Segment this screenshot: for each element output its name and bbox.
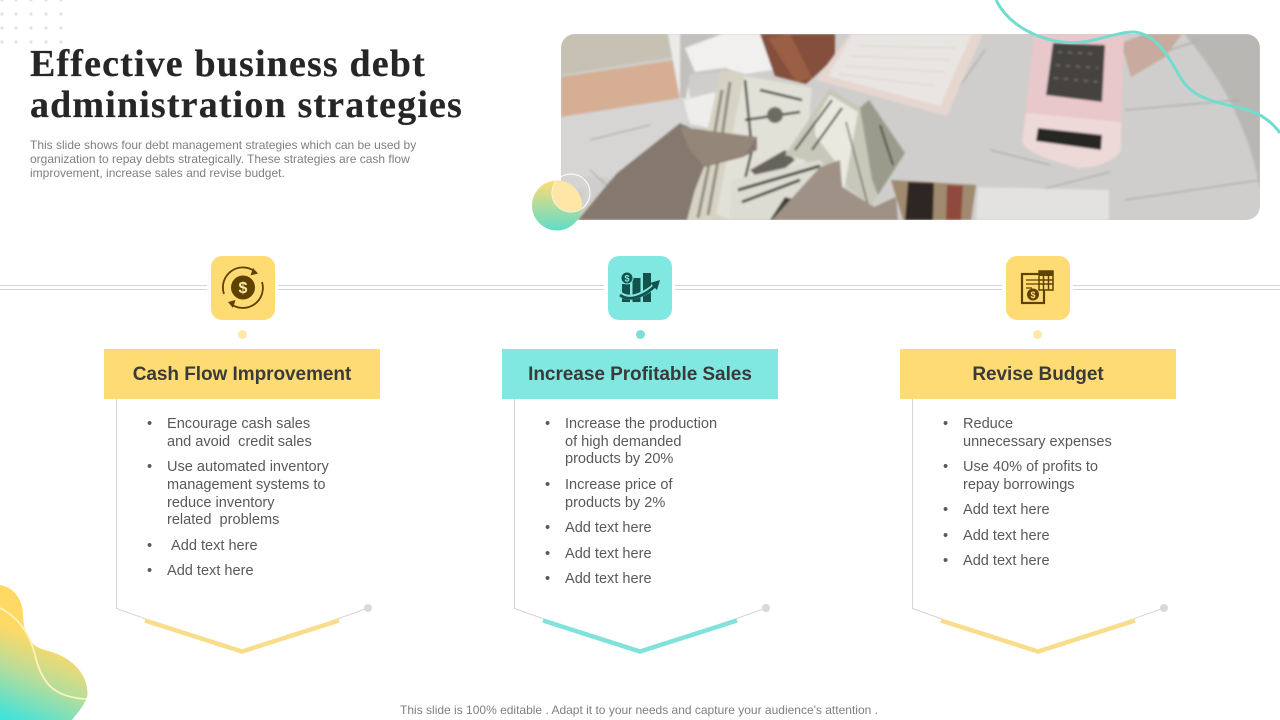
bullet list: Use 40% of profits to [963,459,1098,475]
intro text: This slide shows four debt management strategies which can be used by [30,138,416,152]
icon: budget sheet and calculator: $ [1030,290,1036,300]
bullet list: Add text here [963,502,1050,518]
icon: rising bars: $ [624,274,630,284]
intro text: organization to repay debts strategically. These strategies are cash flow [30,152,410,166]
horizontal connector lines [0,285,1280,290]
decorative gradient bubble [532,174,590,230]
bullet list: Add text here [167,563,254,579]
cash [687,85,732,218]
icon: rising bars [608,256,672,320]
notebook [816,34,983,116]
bullet list: Add text here [963,528,1050,544]
bullet list: Add text here [565,520,652,536]
title: administration strategies [30,84,463,126]
bracket [116,399,372,654]
bullet list [148,416,329,579]
bullet list: and avoid credit sales [167,434,312,450]
column 2: increase profitable sales [502,256,778,654]
table edge and grey backdrop [1184,34,1260,190]
bullet list: Add text here [565,546,652,562]
bullet list: management systems to [167,477,325,493]
decorative gradient blob [0,585,88,720]
bracket [912,399,1168,654]
photo: hands counting money [561,34,1260,220]
bullet list: Add text here [963,553,1050,569]
bullet list: Increase price of [565,477,673,493]
bullet list: Add text here [565,571,652,587]
bullet list: products by 20% [565,451,673,467]
heading [900,349,1176,399]
marker dot [1033,330,1042,339]
column 1: cash flow improvement [104,256,380,654]
bullet list: products by 2% [565,495,665,511]
marble veins [590,40,1260,215]
bullet list: Reduce [963,416,1013,432]
bullet list: Add text here [171,538,258,554]
bullet list [944,416,1112,569]
bullet list: Use automated inventory [167,459,329,475]
heading: Cash Flow Improvement [133,364,351,385]
heading [104,349,380,399]
intro text: improvement, increase sales and revise budget. [30,166,285,180]
bullet list: unnecessary expenses [963,434,1112,450]
intro text [30,138,416,180]
dot pattern [0,0,62,44]
title [30,43,463,126]
heading: Revise Budget [972,364,1104,385]
bullet list: reduce inventory [167,495,275,511]
heading: Increase Profitable Sales [528,364,752,385]
marker dot [238,330,247,339]
marker dot [636,330,644,339]
icon: dollar cycle: $ [239,280,248,297]
icon: dollar cycle [211,256,275,320]
bullet list: repay borrowings [963,477,1075,493]
decorative teal curve [994,0,1280,134]
bullet list [546,416,717,587]
bracket [514,399,770,654]
hands [578,123,757,220]
brown yarn [760,34,835,84]
footer note: This slide is 100% editable . Adapt it to your needs and capture your audience's attention . [400,703,878,717]
column 3: revise budget [900,256,1176,654]
card terminal [1025,34,1125,123]
icon: budget sheet and calculator [1006,256,1070,320]
yarn stripes [891,180,976,220]
bullet list: of high demanded [565,434,681,450]
heading [502,349,778,399]
bullet list: Encourage cash sales [167,416,310,432]
bullet list: related problems [167,512,279,528]
colour swatches [561,34,673,75]
white yarn [685,34,772,74]
title: Effective business debt [30,43,426,85]
bullet list: Increase the production [565,416,717,432]
paper [976,187,1109,220]
hand on terminal [1121,34,1182,77]
